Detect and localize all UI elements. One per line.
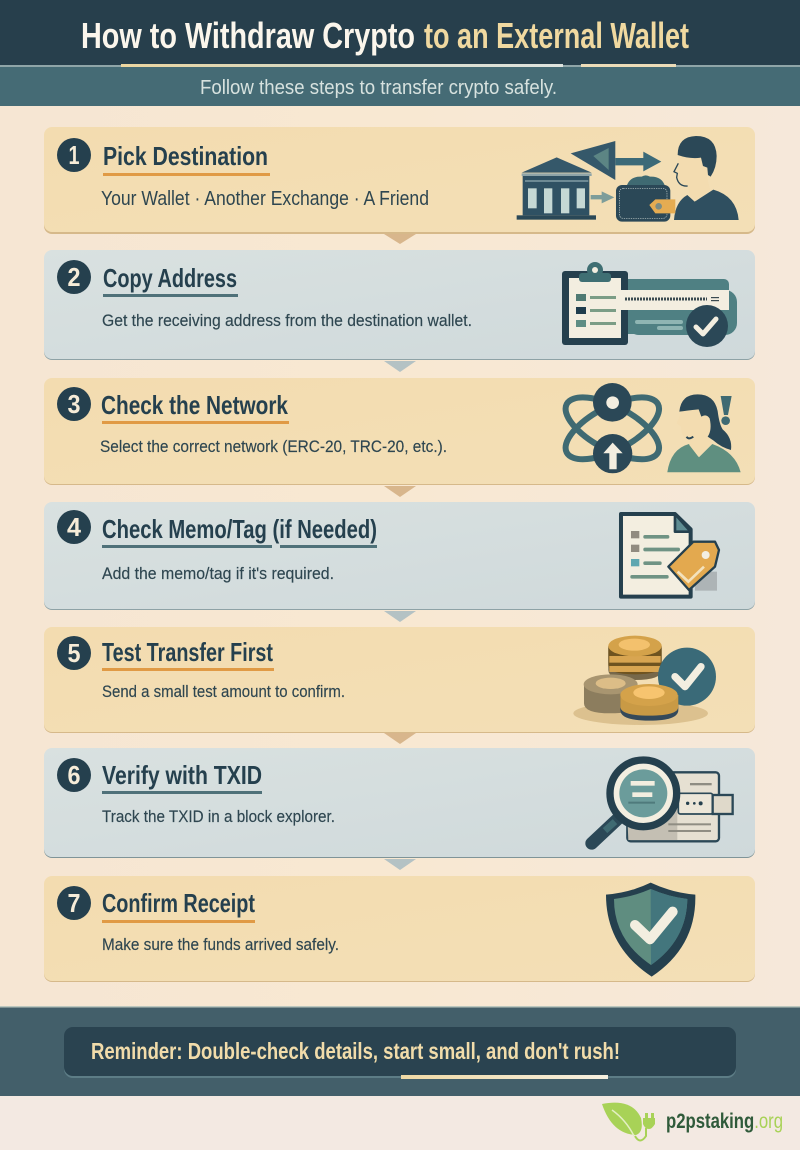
number 4 — [57, 510, 91, 544]
text: funds arrived: Make sure the funds arrived safely. — [102, 936, 339, 954]
panel: step 1 — [44, 127, 755, 244]
heading underline — [102, 791, 262, 794]
panel: step 7 — [44, 876, 755, 982]
text: destinations: Your Wallet · Another Exchange · A Friend — [101, 188, 429, 210]
subtitle: Follow these steps to transfer crypto safely. — [200, 77, 557, 99]
number 2: 2 — [68, 262, 80, 292]
arrow: step 6 to 7 — [384, 859, 416, 870]
panel: step 2 — [44, 250, 755, 372]
heading: Verify with TXID: Verify with TXID — [102, 760, 262, 790]
panel: step 6 — [44, 748, 755, 870]
icon: coins with check — [573, 636, 716, 725]
icon: bank, wallet and person — [517, 136, 739, 222]
logo: p2pstaking.org — [602, 1103, 783, 1140]
logo text: p2pstaking.org — [666, 1110, 783, 1133]
icon: leaf and plug — [602, 1103, 655, 1140]
heading underline — [102, 668, 274, 671]
heading underline — [103, 173, 270, 176]
title — [81, 15, 689, 56]
heading: Confirm Receipt: Confirm Receipt — [102, 888, 255, 918]
reminder box — [64, 1027, 736, 1079]
icon: magnifier and receipt — [592, 760, 733, 843]
heading: Check the Network: Check the Network — [101, 390, 288, 420]
number 3: 3 — [68, 389, 80, 419]
header — [0, 0, 800, 106]
text: select network: Select the correct network (ERC-20, TRC-20, etc.). — [100, 438, 447, 456]
reminder text: Reminder: Double-check details, start small, and don't rush! — [91, 1038, 620, 1064]
number 7 — [57, 886, 91, 920]
arrow: step 3 to 4 — [384, 486, 416, 497]
number 3 — [57, 387, 91, 421]
arrow: step 2 to 3 — [384, 361, 416, 372]
heading: Test Transfer First: Test Transfer First — [102, 637, 273, 667]
bottom strip — [0, 1096, 800, 1150]
arrow: step 1 to 2 — [384, 234, 416, 244]
heading: Pick Destination: Pick Destination — [103, 141, 268, 171]
heading: Check Memo/Tag (if Needed): Check Memo/Tag (if Needed) — [102, 514, 377, 544]
number 4: 4 — [67, 512, 82, 542]
heading underline — [103, 294, 238, 297]
number 2 — [57, 260, 91, 294]
panel: step 5 — [44, 627, 755, 744]
number 6: 6 — [68, 760, 80, 790]
panel: step 4 — [44, 502, 755, 622]
heading: Copy Address: Copy Address — [103, 263, 237, 293]
number 1 — [57, 138, 91, 172]
text: track TXID: Track the TXID in a block explorer. — [102, 808, 335, 826]
heading underline — [102, 920, 255, 923]
heading underlines — [102, 545, 377, 548]
arrow: step 4 to 5 — [384, 611, 416, 622]
panel: step 3 — [44, 378, 755, 497]
number 7: 7 — [68, 888, 80, 918]
number 5: 5 — [68, 638, 80, 668]
title: How to Withdraw Crypto — [81, 15, 415, 56]
icon: network orbit and person — [557, 383, 741, 473]
number 5 — [57, 636, 91, 670]
footer band — [0, 1006, 800, 1096]
text: add memo: Add the memo/tag if it's required. — [102, 565, 334, 583]
icon: shield with check — [606, 883, 695, 977]
title: to an External Wallet — [424, 15, 689, 56]
arrow: step 5 to 6 — [384, 733, 416, 744]
text: test amount: Send a small test amount to confirm. — [102, 683, 345, 701]
number 6 — [57, 758, 91, 792]
icon: document with tag — [621, 514, 719, 597]
text: copy address: Get the receiving address from the destination wallet. — [102, 312, 472, 330]
heading underline — [102, 421, 289, 424]
number 1: 1 — [68, 140, 80, 170]
icon: clipboard and address card — [562, 262, 737, 347]
